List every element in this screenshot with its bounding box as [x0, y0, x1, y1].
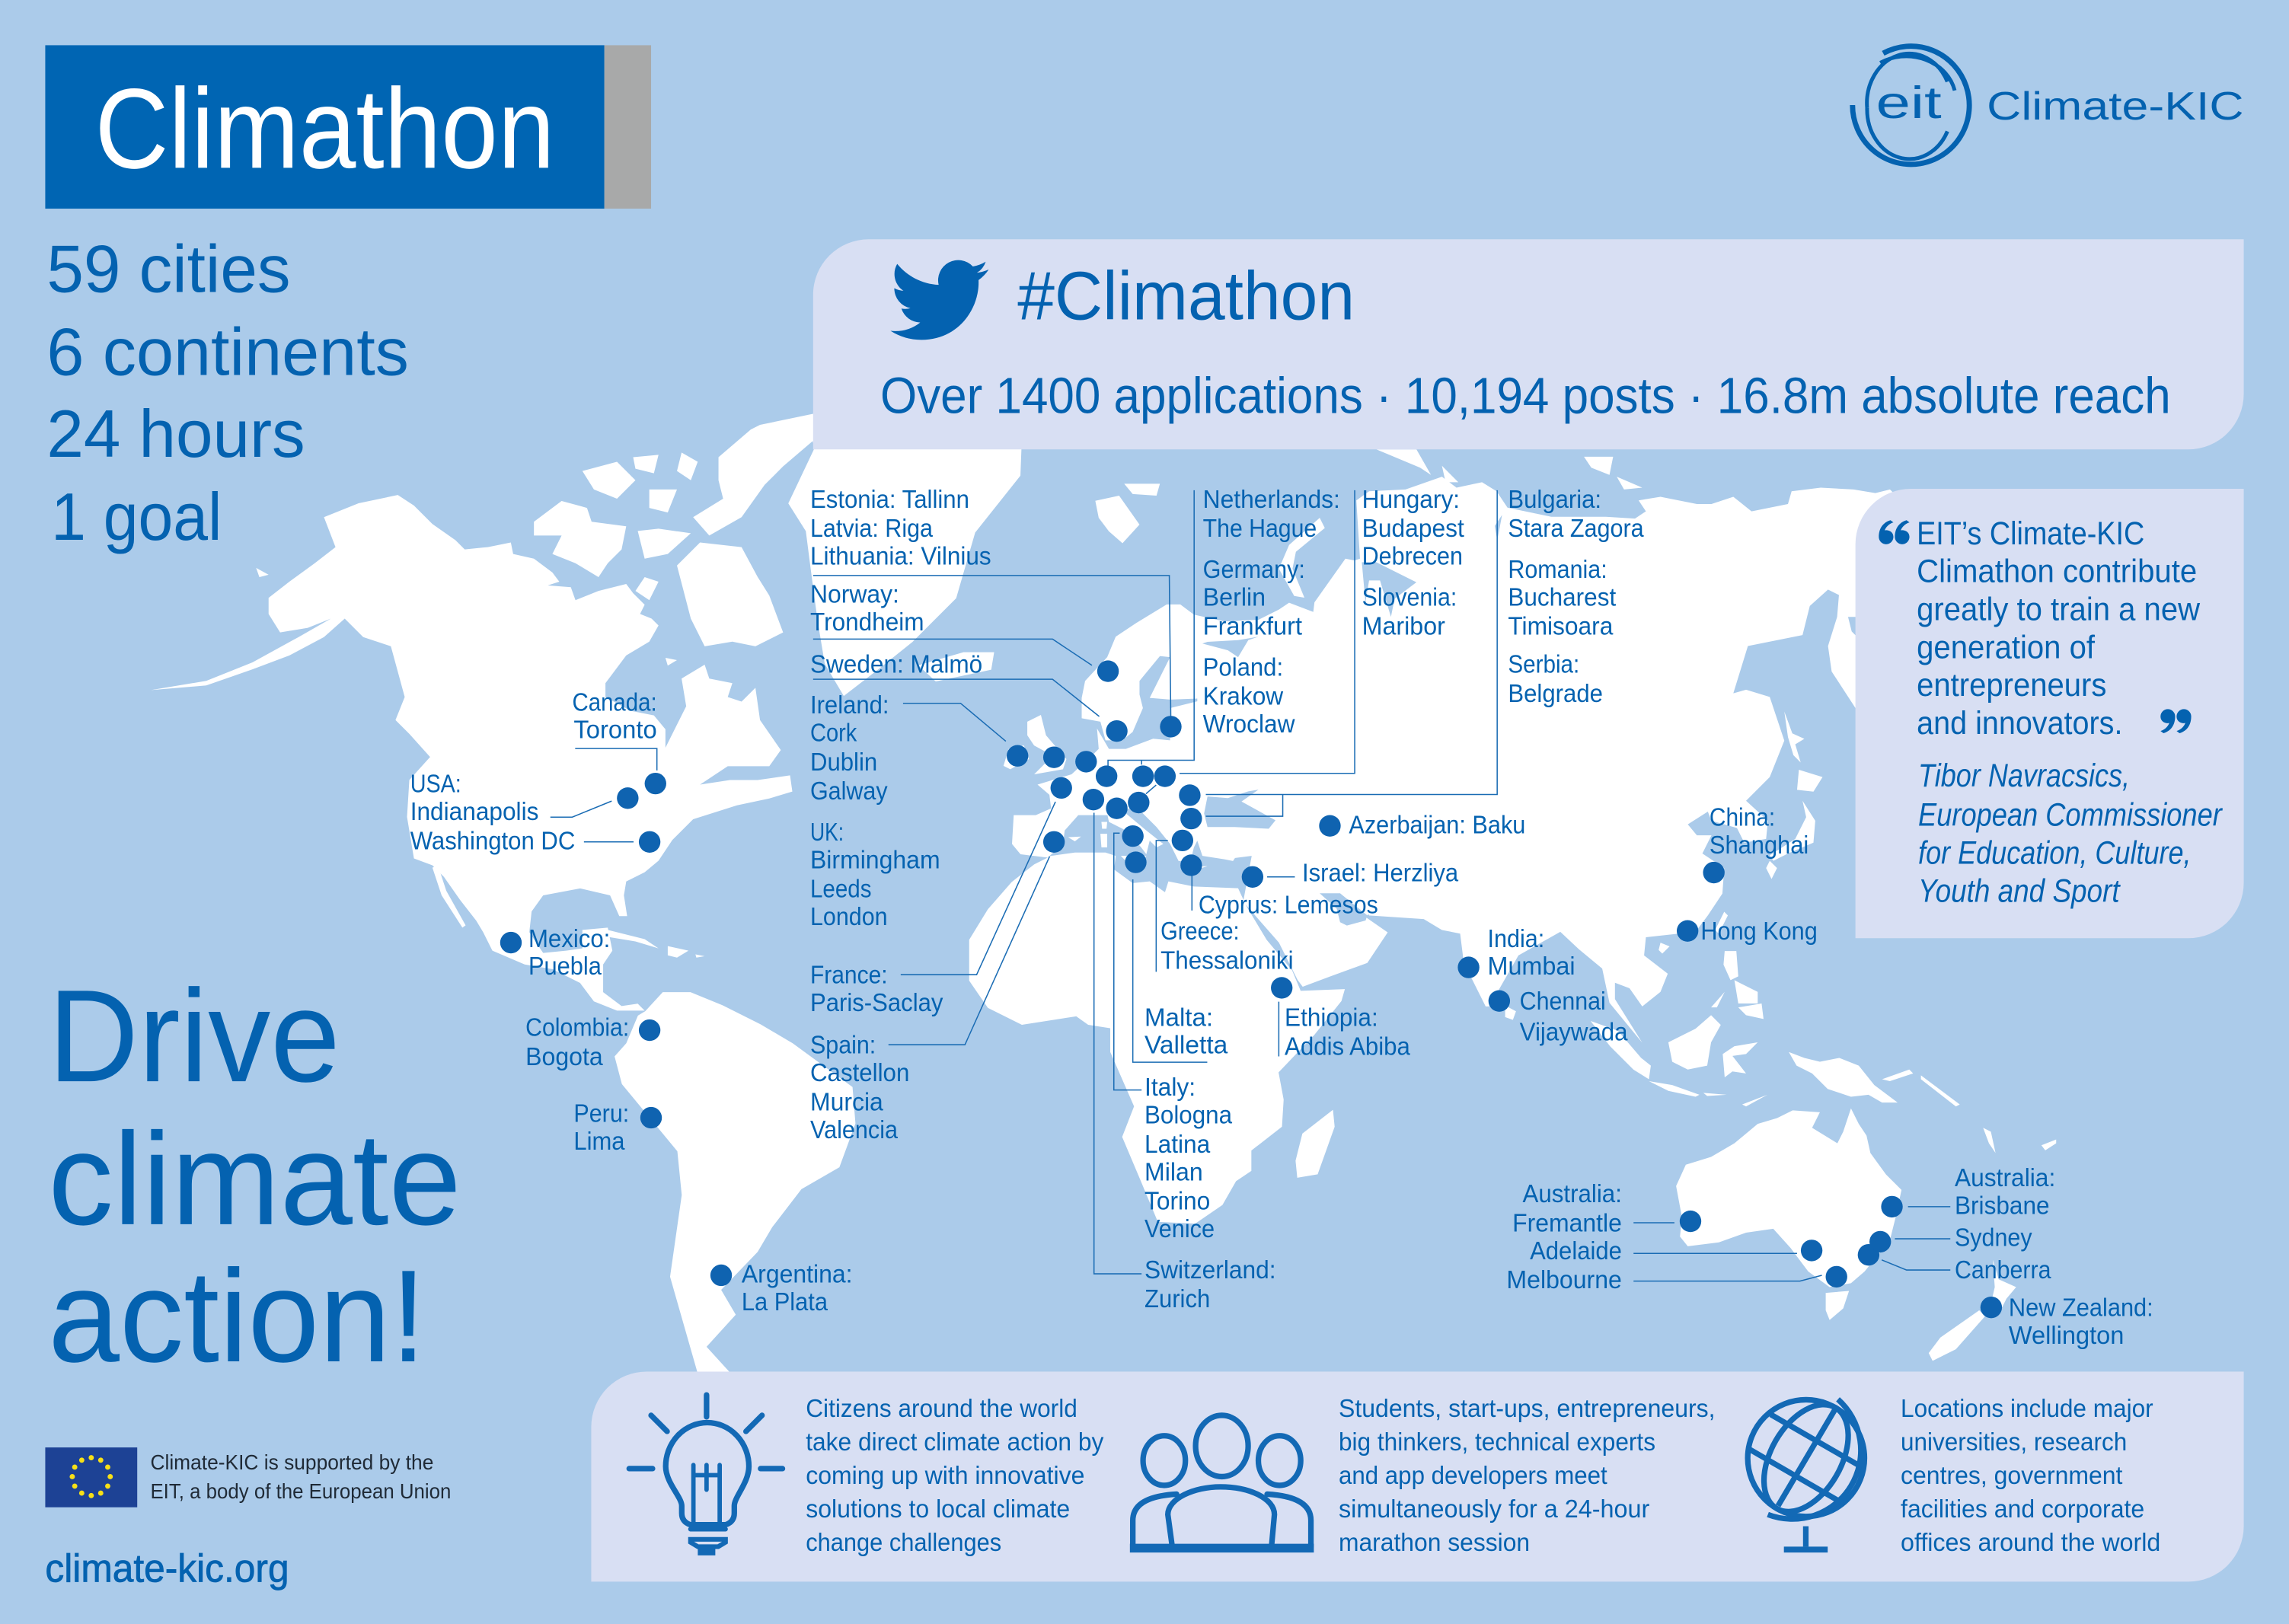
key facts: 6 continents — [46, 314, 409, 390]
label: Norway: Trondheim — [810, 608, 924, 637]
label: Bulgaria: Stara Zagora — [1508, 515, 1644, 543]
label: Australia west and south: Fremantle — [1512, 1209, 1622, 1237]
label: Spain: Murcia — [810, 1088, 883, 1116]
text: locations: facilities and corporate — [1901, 1495, 2144, 1523]
icon: twitter bird — [890, 260, 988, 340]
label: Peru — [573, 1100, 629, 1156]
Polar Siberian islands — [1377, 449, 1643, 490]
label: Slovenia — [1362, 583, 1457, 641]
label: Italy — [1144, 1074, 1232, 1243]
label: UK: London — [810, 903, 888, 931]
label: Switzerland: Switzerland: — [1144, 1256, 1276, 1284]
label: Greece — [1160, 917, 1294, 975]
North America and Arctic islands — [151, 413, 816, 1010]
label: Norway — [810, 580, 924, 637]
label: India: India: — [1488, 925, 1544, 953]
label: Greece: Greece: — [1160, 917, 1240, 946]
text: locations: Locations include major — [1901, 1395, 2153, 1423]
key facts: 24 hours — [46, 396, 305, 471]
label: Hong Kong: Hong Kong — [1700, 917, 1818, 946]
label: Serbia — [1508, 650, 1603, 708]
EU support note — [150, 1450, 451, 1503]
label: Australia west and south: Australia: — [1523, 1180, 1622, 1208]
Madagascar — [1295, 1110, 1335, 1178]
text: citizens: change challenges — [806, 1529, 1001, 1557]
label: UK: UK: — [810, 818, 844, 847]
label: Italy: Italy: — [1144, 1074, 1196, 1102]
Africa, Europe and Southwest Asia — [969, 483, 1432, 1224]
text: citizens: solutions to local climate — [806, 1495, 1070, 1523]
text: citizens: coming up with innovative — [806, 1462, 1084, 1490]
label: Baltics: Estonia: Tallinn — [810, 486, 969, 514]
location labels — [410, 486, 2153, 1350]
key facts: 1 goal — [51, 479, 222, 554]
label: Australia east: Brisbane — [1955, 1192, 2050, 1220]
label: Australia east: Australia: — [1955, 1164, 2055, 1192]
world map — [151, 413, 2056, 1379]
label: Italy: Bologna — [1144, 1102, 1232, 1130]
Southeast Asia, Australia and New Zealand — [1505, 951, 2056, 1361]
label: France — [810, 962, 943, 1017]
label: Colombia: Bogota — [525, 1043, 603, 1071]
Greenland — [788, 438, 1022, 696]
label: Chennai and Vijaywada: Chennai — [1520, 987, 1606, 1016]
slogan: action! — [48, 1243, 426, 1389]
key facts — [46, 231, 409, 554]
icon: light bulb — [629, 1395, 783, 1555]
label: USA: Washington DC — [410, 827, 575, 855]
label: Australia east: Sydney — [1955, 1224, 2032, 1252]
icon: people — [1130, 1415, 1314, 1552]
Kara Sea, Okhotsk inlet — [1362, 515, 1857, 637]
label: Hungary: Debrecen — [1362, 543, 1463, 571]
label: Peru: Peru: — [573, 1100, 629, 1128]
key facts: 59 cities — [46, 231, 291, 306]
label: Ireland: Cork — [810, 719, 857, 748]
EU support note: EIT, a body of the European Union — [150, 1479, 451, 1503]
Iceland — [918, 652, 994, 681]
label: Israel: Israel: Herzliya — [1302, 860, 1458, 888]
label: Hungary: Budapest — [1362, 515, 1464, 543]
label: Poland — [1203, 653, 1295, 739]
label: UK: Leeds — [810, 876, 872, 904]
label: Germany — [1203, 556, 1305, 641]
Indonesia and Philippines — [1591, 951, 1767, 1106]
EU support note: Climate-KIC is supported by the — [150, 1450, 433, 1474]
New Zealand — [1929, 1260, 2016, 1361]
Novaya Zemlya — [1279, 518, 1325, 598]
label: India: Mumbai — [1488, 952, 1575, 981]
label: Ireland: Ireland: — [810, 691, 889, 719]
Australia — [1676, 1109, 1901, 1287]
New Guinea — [1789, 1052, 1898, 1102]
text: students: Students, start-ups, entrepreneurs, — [1339, 1395, 1716, 1423]
label: Colombia: Colombia: — [525, 1014, 629, 1042]
text: locations: offices around the world — [1901, 1529, 2160, 1557]
label: Hungary — [1362, 486, 1464, 571]
label: Serbia: Belgrade — [1508, 680, 1603, 708]
label: UK — [810, 818, 940, 931]
label: Spain: Castellon — [810, 1059, 909, 1087]
label: Switzerland — [1144, 1256, 1276, 1313]
label: Poland: Wroclaw — [1203, 710, 1295, 739]
website: climate-kic.org — [45, 1546, 289, 1590]
quote attribution: for Education, Culture, — [1918, 835, 2192, 871]
title banner: Climathon — [95, 65, 554, 192]
label: Colombia — [525, 1014, 629, 1071]
text: locations: universities, research — [1901, 1428, 2127, 1456]
label: Canada: Canada: — [573, 688, 657, 716]
icon: globe — [1747, 1390, 1866, 1552]
slogan: climate — [48, 1106, 461, 1252]
label: Slovenia: Maribor — [1362, 613, 1445, 641]
label: Netherlands: The Hague — [1203, 515, 1317, 543]
text: citizens: Citizens around the world — [806, 1395, 1077, 1423]
label: Mexico — [528, 925, 610, 981]
quote text: entrepreneurs — [1917, 667, 2106, 703]
quote text: Climathon contribute — [1917, 554, 2197, 589]
label: Italy: Milan — [1144, 1158, 1203, 1186]
icon: closing quote marks — [2160, 709, 2192, 733]
quote text — [1917, 515, 2201, 741]
label: USA: USA: — [410, 771, 461, 799]
label: Bulgaria — [1508, 486, 1644, 543]
Asia — [1296, 449, 1894, 1043]
panel: twitter stats — [813, 239, 2244, 449]
text: locations — [1901, 1395, 2160, 1557]
label: China — [1710, 804, 1809, 860]
label: Australia east — [1955, 1164, 2055, 1284]
label: Romania: Bucharest — [1508, 583, 1617, 611]
quote text: greatly to train a new — [1917, 591, 2201, 627]
Mediterranean islands — [1068, 822, 1237, 871]
panel: bottom facts — [591, 1371, 2244, 1581]
label: Spain: Spain: — [810, 1032, 876, 1060]
label: China: Shanghai — [1710, 831, 1809, 860]
label: New Zealand: Wellington — [2009, 1322, 2124, 1350]
label: Romania — [1508, 556, 1617, 641]
Pacific islands — [1882, 1070, 2056, 1153]
UK — [1027, 715, 1066, 774]
label: India — [1488, 925, 1575, 981]
label: Baltics: Latvia: Riga — [810, 515, 933, 543]
icon: opening quote marks — [1879, 520, 1910, 544]
label: Bulgaria: Bulgaria: — [1508, 486, 1601, 514]
label: Argentina: La Plata — [742, 1288, 828, 1316]
label: Malta: Malta: — [1144, 1003, 1213, 1032]
icon: EU flag — [45, 1447, 137, 1508]
Sri Lanka — [1505, 1006, 1516, 1019]
label: Ireland: Galway — [810, 777, 888, 806]
quote text: and innovators. — [1917, 705, 2122, 741]
label: Spain: Valencia — [810, 1116, 898, 1144]
label: Hungary: Hungary: — [1362, 486, 1460, 514]
label: Romania: Timisoara — [1508, 613, 1614, 641]
label: Mexico: Puebla — [528, 952, 602, 981]
text: students: simultaneously for a 24-hour — [1339, 1495, 1649, 1523]
label: Mexico: Mexico: — [528, 925, 610, 953]
label: USA: Indianapolis — [410, 798, 538, 826]
label: Australia west and south: Melbourne — [1506, 1266, 1622, 1294]
Sakhalin and Japan — [1766, 712, 1822, 879]
label: Poland: Krakow — [1203, 683, 1284, 711]
label: Ethiopia — [1285, 1003, 1410, 1061]
label: Ireland: Dublin — [810, 748, 877, 777]
label: New Zealand — [2009, 1294, 2153, 1350]
label: Azerbaijan: Azerbaijan: Baku — [1349, 811, 1525, 839]
slogan — [48, 962, 461, 1389]
label: Ireland — [810, 691, 889, 806]
label: Germany: Berlin — [1203, 583, 1266, 611]
label: Australia west and south: Adelaide — [1530, 1237, 1622, 1265]
location markers — [500, 660, 2002, 1318]
label: UK: Birmingham — [810, 846, 940, 874]
Tasmania — [1826, 1291, 1849, 1320]
logo: EIT Climate-KIC — [1853, 46, 2244, 164]
label: Serbia: Serbia: — [1508, 650, 1579, 678]
label: Malta — [1144, 1003, 1228, 1060]
South America — [615, 992, 855, 1379]
label: Peru: Lima — [573, 1128, 625, 1156]
Black Sea, White Sea and Persian Gulf — [1202, 637, 1368, 926]
label: USA — [410, 771, 575, 855]
text: locations: centres, government — [1901, 1462, 2123, 1490]
label: Chennai and Vijaywada: Vijaywada — [1520, 1018, 1628, 1046]
stats line: Over 1400 applications · 10,194 posts · 16.8m absolute reach — [880, 367, 2171, 424]
hashtag: #Climathon — [1017, 258, 1355, 335]
quote attribution: European Commissioner — [1918, 797, 2223, 833]
connector lines — [551, 490, 1950, 1281]
label: Chennai and Vijaywada — [1520, 987, 1628, 1046]
Europe, western Russia and Arabia — [1012, 603, 1432, 987]
quote text: EIT’s Climate-KIC — [1917, 515, 2144, 551]
label: Ethiopia: Ethiopia: — [1285, 1003, 1378, 1032]
Ireland — [1004, 745, 1029, 769]
label: Cyprus: Cyprus: Lemesos — [1199, 892, 1378, 920]
text: citizens: take direct climate action by — [806, 1428, 1104, 1456]
label: Italy: Latina — [1144, 1131, 1211, 1159]
logo: EIT Climate-KIC: Climate-KIC — [1987, 84, 2244, 128]
label: Germany: Frankfurt — [1203, 613, 1303, 641]
quote text: generation of — [1917, 629, 2095, 665]
label: Ethiopia: Addis Abiba — [1285, 1033, 1410, 1061]
Italy — [1107, 813, 1164, 854]
label: Poland: Poland: — [1203, 653, 1283, 681]
quote attribution: Youth and Sport — [1918, 873, 2121, 908]
label: Switzerland: Zurich — [1144, 1285, 1210, 1313]
label: Romania: Romania: — [1508, 556, 1607, 584]
label: France: Paris-Saclay — [810, 989, 943, 1017]
text: citizens — [806, 1395, 1104, 1557]
title banner — [45, 45, 651, 209]
label: Slovenia: Slovenia: — [1362, 583, 1457, 611]
label: Australia west and south — [1506, 1180, 1622, 1294]
label: Norway: Norway: — [810, 580, 899, 608]
label: Greece: Thessaloniki — [1160, 947, 1294, 975]
text: students: big thinkers, technical experts — [1339, 1428, 1655, 1456]
text: students: marathon session — [1339, 1529, 1530, 1557]
label: China: China: — [1710, 804, 1775, 832]
quote attribution — [1918, 758, 2223, 908]
label: Australia east: Canberra — [1955, 1256, 2051, 1284]
logo: EIT Climate-KIC: eit — [1876, 77, 1942, 128]
label: Italy: Venice — [1144, 1215, 1215, 1243]
panel: quote — [1856, 489, 2244, 938]
Svalbard and Franz Josef Land — [1095, 483, 1160, 544]
label: Sweden: Sweden: Malmö — [810, 650, 982, 678]
label: Baltics — [810, 486, 991, 571]
label: Italy: Torino — [1144, 1188, 1210, 1216]
label: Canada — [573, 688, 657, 745]
label: New Zealand: New Zealand: — [2009, 1294, 2153, 1322]
label: Netherlands: Netherlands: — [1203, 486, 1340, 514]
label: France: France: — [810, 962, 888, 990]
label: Netherlands — [1203, 486, 1340, 543]
text: students — [1339, 1395, 1716, 1557]
label: Baltics: Lithuania: Vilnius — [810, 543, 991, 571]
slogan: Drive — [48, 962, 340, 1109]
label: Canada: Toronto — [573, 716, 657, 745]
Africa — [969, 853, 1345, 1224]
label: Malta: Valletta — [1144, 1032, 1228, 1060]
label: Argentina: Argentina: — [742, 1261, 853, 1289]
label: Argentina — [742, 1261, 853, 1316]
text: students: and app developers meet — [1339, 1462, 1607, 1490]
quote attribution: Tibor Navracsics, — [1918, 758, 2130, 793]
Taiwan and Hainan — [1658, 912, 1728, 954]
label: Germany: Germany: — [1203, 556, 1305, 584]
label: Spain — [810, 1032, 909, 1144]
